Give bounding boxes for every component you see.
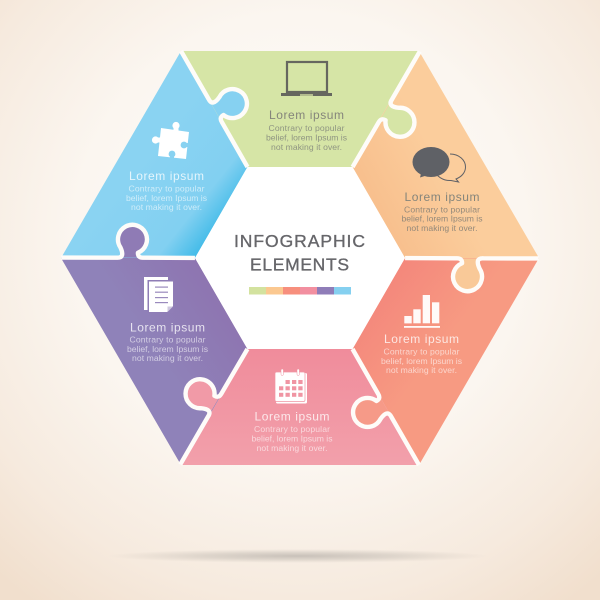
icon: documents	[144, 277, 174, 312]
text: coral: belief, lorem Ipsum is	[381, 356, 462, 366]
icon: bar chart	[404, 295, 440, 328]
text: blue: Lorem ipsum	[129, 169, 204, 183]
text: green: Contrary to popular	[268, 123, 345, 133]
panel: orange chat	[402, 147, 482, 233]
text: purple: Lorem ipsum	[130, 320, 205, 334]
white puzzle dividers	[61, 51, 539, 465]
text: blue	[126, 169, 207, 212]
panel: pink calendar	[252, 369, 332, 453]
text: purple: Contrary to popular	[130, 334, 206, 344]
text: purple	[127, 320, 208, 363]
color legend bar	[249, 287, 351, 294]
text: pink	[252, 410, 332, 453]
text: coral	[381, 332, 462, 375]
text: purple: belief, lorem Ipsum is	[127, 344, 208, 354]
text: purple: not making it over.	[132, 353, 203, 363]
text: orange: belief, lorem Ipsum is	[402, 214, 482, 224]
text: orange: Contrary to popular	[404, 204, 480, 214]
text: green: Lorem ipsum	[269, 108, 344, 122]
panel: purple documents	[127, 277, 208, 363]
text: coral: Contrary to popular	[384, 346, 460, 356]
text: green: belief, lorem Ipsum is	[266, 132, 347, 142]
text: pink: Lorem ipsum	[254, 410, 330, 424]
text: pink: Contrary to popular	[254, 424, 330, 434]
panel: blue puzzle	[126, 122, 207, 212]
ground shadow	[108, 549, 488, 563]
text: coral: Lorem ipsum	[384, 332, 459, 346]
text: orange	[402, 190, 482, 233]
panel: green laptop	[266, 62, 347, 152]
center hexagon	[195, 167, 405, 349]
icon: speech bubbles	[412, 147, 466, 182]
text: blue: not making it over.	[131, 202, 202, 212]
title	[234, 231, 365, 274]
title: INFOGRAPHIC	[234, 231, 365, 251]
text: green: not making it over.	[271, 142, 342, 152]
hexagon puzzle pieces	[61, 51, 539, 465]
text: orange: not making it over.	[406, 223, 478, 233]
icon: puzzle piece	[152, 122, 189, 159]
text: pink: belief, lorem Ipsum is	[252, 434, 332, 444]
text: blue: Contrary to popular	[128, 184, 205, 194]
panel: coral chart	[381, 295, 462, 375]
icon: calendar	[275, 369, 307, 404]
text: coral: not making it over.	[386, 365, 457, 375]
title: ELEMENTS	[250, 254, 349, 274]
text: blue: belief, lorem Ipsum is	[126, 193, 207, 203]
text: green	[266, 108, 347, 152]
puzzle knobs	[108, 89, 492, 427]
text: pink: not making it over.	[256, 443, 328, 453]
icon: laptop	[281, 62, 332, 96]
text: orange: Lorem ipsum	[404, 190, 480, 204]
